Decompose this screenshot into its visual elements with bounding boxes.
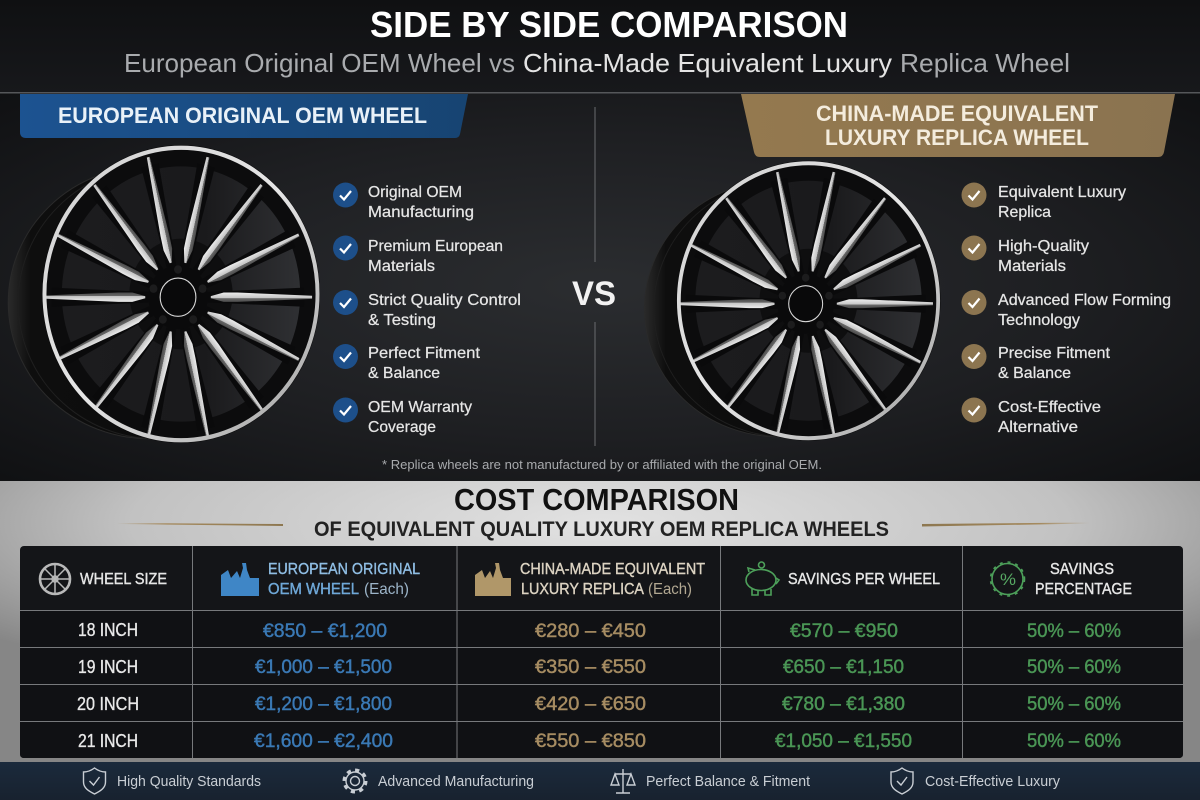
row: 19 inch: 19 INCH (78, 657, 138, 677)
feature: OEM Warranty: Coverage (368, 419, 436, 436)
feature: Equivalent Luxury Replica (962, 182, 1126, 221)
icon: percent badge (990, 562, 1024, 596)
cost subheading: OF EQUIVALENT QUALITY LUXURY OEM REPLICA WHEELS (314, 518, 889, 541)
feature: Precise Fitment (962, 344, 1111, 382)
footer item: high quality standards (84, 768, 261, 794)
row: 21 inch: 50% – 60% (1027, 730, 1121, 752)
cost heading: COST COMPARISON (454, 482, 739, 517)
comparison panel (0, 92, 1200, 481)
footer item: high quality standards: High Quality Standards (117, 774, 261, 790)
row: 20 inch: 50% – 60% (1027, 693, 1121, 715)
banner: China-made: LUXURY REPLICA WHEEL (825, 125, 1089, 150)
footer item: cost-effective luxury (891, 768, 1061, 794)
subtitle: China-Made Equivalent Luxury (523, 48, 892, 78)
icon: gold factory (475, 563, 511, 596)
feature: Premium European Materials (333, 236, 503, 275)
subtitle (124, 48, 1070, 78)
column header: China-made: LUXURY REPLICA (521, 581, 644, 598)
column header: savings percentage (990, 561, 1132, 598)
column header: savings percentage: SAVINGS (1050, 561, 1114, 578)
feature: High-Quality Materials: Materials (998, 258, 1066, 275)
feature: Precise Fitment: Precise Fitment (998, 345, 1111, 362)
row: 19 inch: €1,000 – €1,500 (255, 656, 392, 678)
feature: Original OEM Manufacturing (333, 182, 474, 221)
column header: China-made (475, 561, 705, 598)
feature list: European (333, 182, 521, 436)
footer item: advanced manufacturing: Advanced Manufacturing (378, 774, 534, 790)
feature: High-Quality Materials: High-Quality (998, 238, 1089, 255)
banner: China-made: CHINA-MADE EQUIVALENT (816, 101, 1098, 126)
footer item: cost-effective luxury: Cost-Effective Luxury (925, 774, 1061, 790)
footnote: * Replica wheels are not manufactured by or affiliated with the original OEM. (382, 458, 822, 472)
header band (0, 0, 1200, 92)
icon: wheel (40, 564, 70, 594)
subtitle: Replica Wheel (900, 48, 1070, 78)
banner: China-made (741, 94, 1175, 157)
feature: Original OEM Manufacturing: Manufacturing (368, 204, 474, 221)
column header: European (221, 561, 420, 598)
row: 20 inch: 20 INCH (77, 694, 139, 714)
row: 21 inch: €1,600 – €2,400 (254, 730, 393, 752)
feature: Equivalent Luxury Replica: Replica (998, 204, 1051, 221)
title: SIDE BY SIDE COMPARISON (370, 4, 848, 45)
footer bar (0, 762, 1200, 800)
column header: European: EUROPEAN ORIGINAL (268, 561, 420, 578)
row: 19 inch: 50% – 60% (1027, 656, 1121, 678)
footer item: perfect balance and fitment: Perfect Balance & Fitment (646, 774, 810, 790)
row: 21 inch: €1,050 – €1,550 (775, 730, 912, 752)
feature: Premium European Materials: Materials (368, 258, 435, 275)
feature: Advanced Flow Forming: Technology (998, 312, 1080, 329)
feature: Cost-Effective Alternative (962, 398, 1101, 436)
subtitle: European Original OEM Wheel vs (124, 48, 515, 78)
column header: savings percentage: PERCENTAGE (1035, 581, 1132, 598)
feature: OEM Warranty: OEM Warranty (368, 399, 472, 416)
feature: Perfect Fitment: Perfect Fitment (368, 345, 481, 362)
row: 18 inch: 18 INCH (78, 620, 138, 640)
feature: Strict Quality Control (333, 290, 521, 329)
column header: European: (Each) (364, 581, 409, 598)
banner: European (20, 94, 468, 138)
feature: Strict Quality Control: Strict Quality Control (368, 292, 521, 309)
wheel: European OEM (8, 145, 320, 443)
feature: Precise Fitment: & Balance (998, 365, 1071, 382)
icon: scale (611, 769, 635, 793)
feature: Cost-Effective Alternative: Cost-Effective (998, 399, 1101, 416)
row: 21 inch: €550 – €850 (535, 730, 646, 752)
column header: wheel size: WHEEL SIZE (80, 571, 167, 588)
row: 20 inch: €780 – €1,380 (782, 693, 905, 715)
feature: Equivalent Luxury Replica: Equivalent Luxury (998, 184, 1126, 201)
feature: Perfect Fitment (333, 344, 481, 382)
icon: percent badge: % (1000, 570, 1016, 589)
row: 18 inch: €850 – €1,200 (263, 620, 387, 642)
row: 18 inch: 50% – 60% (1027, 620, 1121, 642)
banner: European: EUROPEAN ORIGINAL OEM WHEEL (58, 103, 427, 128)
row: 19 inch: €650 – €1,150 (783, 656, 904, 678)
feature: Original OEM Manufacturing: Original OEM (368, 184, 462, 201)
column header: China-made: (Each) (648, 581, 692, 598)
feature: Strict Quality Control: & Testing (368, 312, 436, 329)
column header: savings per wheel: SAVINGS PER WHEEL (788, 571, 940, 588)
feature: OEM Warranty (333, 398, 472, 436)
footer item: advanced manufacturing (344, 770, 534, 792)
row: 20 inch: €1,200 – €1,800 (255, 693, 392, 715)
icon: gear (344, 770, 366, 792)
footer item: perfect balance and fitment (611, 769, 810, 793)
feature: Advanced Flow Forming (962, 290, 1171, 329)
column header: wheel size (40, 564, 167, 594)
feature: Premium European Materials: Premium European (368, 238, 503, 255)
row: 20 inch (77, 693, 1121, 715)
cost table (20, 546, 1183, 758)
row: 21 inch: 21 INCH (78, 731, 138, 751)
row: 18 inch (78, 620, 1121, 642)
cost comparison section (0, 481, 1200, 762)
wheel: China-made replica (644, 161, 941, 441)
row: 20 inch: €420 – €650 (535, 693, 646, 715)
feature: Cost-Effective Alternative: Alternative (998, 419, 1078, 436)
feature: High-Quality Materials (962, 236, 1089, 275)
icon: piggy bank (746, 562, 779, 595)
VS divider: VS (572, 275, 616, 313)
feature: Perfect Fitment: & Balance (368, 365, 440, 382)
column header: European: OEM WHEEL (268, 581, 359, 598)
feature: Advanced Flow Forming: Advanced Flow Forming (998, 292, 1171, 309)
row: 18 inch: €570 – €950 (790, 620, 898, 642)
feature list: China-made (962, 182, 1171, 436)
icon: blue factory (221, 563, 259, 596)
row: 18 inch: €280 – €450 (535, 620, 646, 642)
row: 19 inch: €350 – €550 (535, 656, 646, 678)
column header: savings per wheel (746, 562, 940, 595)
row: 21 inch (78, 730, 1121, 752)
column header: China-made: CHINA-MADE EQUIVALENT (520, 561, 705, 578)
row: 19 inch (78, 656, 1121, 678)
